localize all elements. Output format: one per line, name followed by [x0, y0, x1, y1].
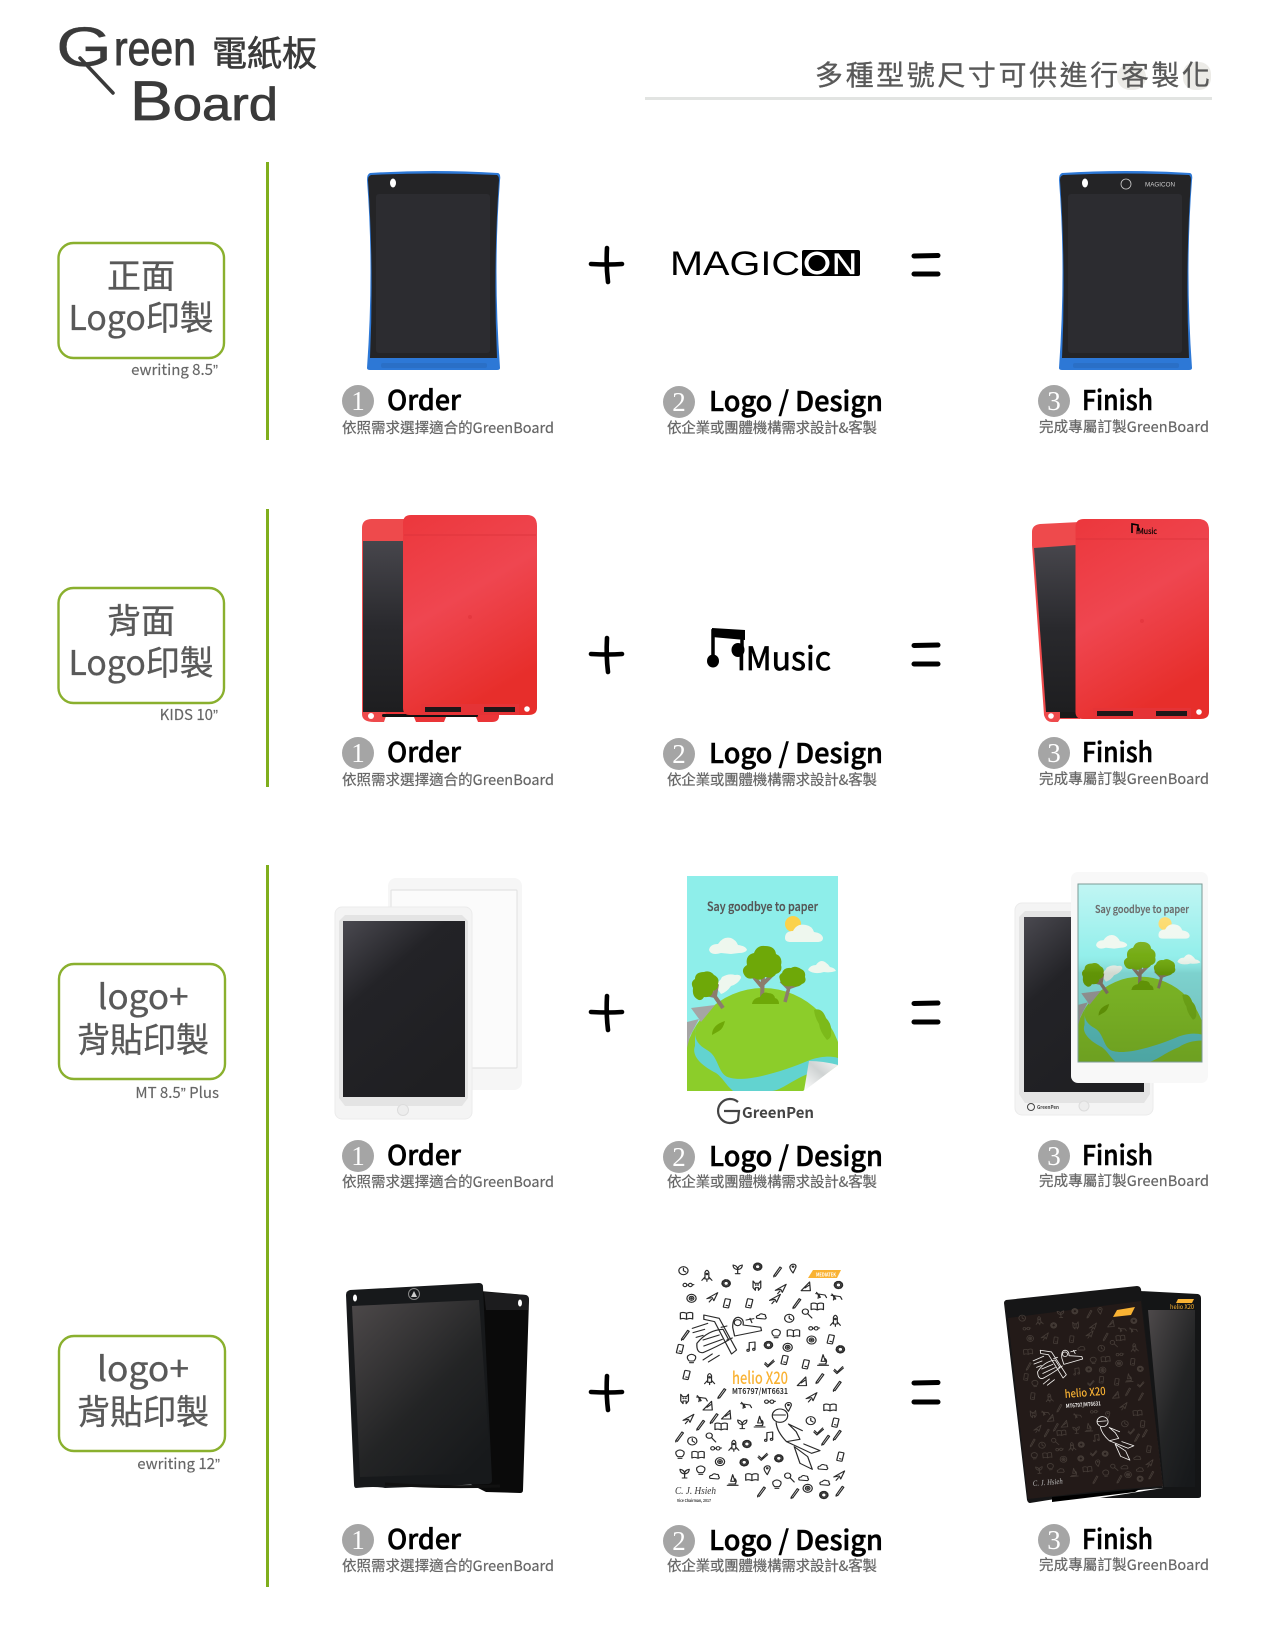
row 3: step 3: 完成專屬訂製GreenBoard [1039, 1170, 1209, 1191]
row 4: black tablet finish: helio X20 [1170, 1301, 1194, 1311]
row 4: doodle poster: Vice Chairman, 2017 [676, 1497, 712, 1504]
row 3: step 1: 1 [351, 1141, 365, 1171]
row 1: step 2 [663, 380, 883, 438]
panel: logo plus back sticker ewriting: ewriting 12” [137, 1453, 220, 1474]
row 2: step 1: Order [387, 731, 462, 770]
row 1: step 3: Finish [1082, 379, 1153, 418]
row 3: white tablet finish [1015, 872, 1208, 1115]
row 1: blue tablet finish: MAGICON [1145, 182, 1175, 188]
row 3: step 2: 2 [672, 1142, 686, 1172]
row 4: black tablet finish: helio X20 [1064, 1383, 1106, 1402]
row 4: black tablet order [346, 1283, 529, 1493]
divider rules [266, 162, 269, 1587]
panel: logo plus back sticker MT: MT 8.5” Plus [135, 1082, 219, 1103]
row 2: step 1 [342, 731, 554, 790]
panel: front logo label [58, 243, 224, 380]
row 1: MAGICON logo [670, 245, 860, 283]
row 2: iMusic logo: iMusic [737, 634, 831, 680]
logo: Green Board: reen [114, 23, 196, 76]
panel: front logo label: ewriting 8.5” [131, 359, 218, 380]
row 3: white tablet finish: GreenPen [1037, 1104, 1059, 1111]
row 2: red tablet finish [1032, 519, 1209, 722]
logo: Green Board: G [56, 15, 112, 78]
row 1: step 2: 依企業或團體機構需求設計&客製 [667, 417, 877, 438]
row 1: blue tablet finish [1059, 171, 1192, 370]
row 4: equals [914, 1382, 938, 1402]
panel: logo plus back sticker ewriting: logo+ [97, 1342, 189, 1391]
row 2: plus [591, 638, 622, 672]
logo: Green Board: Board [130, 69, 278, 132]
panel: back logo label: KIDS 10” [160, 704, 218, 725]
row 3: step 1: Order [387, 1134, 462, 1173]
row 3: plus [591, 996, 622, 1030]
panel: logo plus back sticker MT [59, 964, 225, 1103]
row 3: step 2 [663, 1135, 883, 1192]
panel: logo plus back sticker MT: logo+ [98, 970, 188, 1019]
row 1: blue tablet order [367, 171, 500, 370]
row 1: step 1: 依照需求選擇適合的GreenBoard [342, 417, 554, 438]
row 3: step 2: Logo / Design [709, 1135, 883, 1174]
row 1: plus [591, 248, 622, 282]
row 4: step 2: 2 [672, 1526, 686, 1556]
row 2: step 3: 3 [1047, 738, 1061, 768]
row 1: step 3 [1038, 379, 1209, 437]
row 3: step 3: 3 [1047, 1141, 1061, 1171]
row 1: equals [914, 256, 938, 274]
row 1: step 3: 3 [1047, 386, 1061, 416]
row 1: step 2: Logo / Design [709, 380, 883, 419]
row 4: step 3: Finish [1082, 1518, 1153, 1557]
row 4: doodle poster: C. J. Hsieh [675, 1485, 716, 1497]
row 4: step 1: Order [387, 1518, 462, 1557]
panel: logo plus back sticker ewriting [59, 1336, 225, 1474]
row 2: step 3: Finish [1082, 731, 1153, 770]
logo: Green Board: 電紙板 [212, 26, 317, 77]
row 1: step 2: 2 [672, 387, 686, 417]
panel: logo plus back sticker ewriting: 背貼印製 [77, 1385, 209, 1434]
row 3: white tablet finish: Say goodbye to paper [1095, 902, 1190, 917]
row 2: step 1: 依照需求選擇適合的GreenBoard [342, 769, 554, 790]
row 1: MAGICON logo: MAGIC [670, 245, 800, 283]
row 4: doodle poster: MT6797/MT6631 [732, 1386, 788, 1397]
row 2: step 2: 2 [672, 739, 686, 769]
row 3: equals [914, 1003, 938, 1022]
row 1: step 1: Order [387, 379, 462, 418]
row 2: red tablet finish: iMusic [1136, 526, 1157, 537]
row 4: step 2 [663, 1519, 883, 1576]
row 4: step 1: 依照需求選擇適合的GreenBoard [342, 1555, 554, 1576]
row 4: step 3 [1038, 1518, 1209, 1575]
row 1: step 1: 1 [351, 386, 365, 416]
row 2: equals [914, 645, 938, 664]
row 3: step 3: Finish [1082, 1134, 1153, 1173]
row 1: step 1 [342, 379, 554, 438]
row 3: white tablet order [335, 878, 522, 1119]
row 1: MAGICON logo: N [832, 248, 857, 281]
panel: back logo label: 背面 [107, 594, 175, 643]
row 2: step 1: 1 [351, 738, 365, 768]
row 4: step 2: 依企業或團體機構需求設計&客製 [667, 1555, 877, 1576]
row 3: poster art [683, 876, 843, 1154]
row 1: step 3: 完成專屬訂製GreenBoard [1039, 416, 1209, 437]
row 3: GreenPen logo: GreenPen [742, 1102, 814, 1123]
logo: Green Board [56, 15, 317, 132]
panel: back logo label: Logo印製 [68, 636, 214, 685]
row 4: doodle poster: helio X20 [732, 1364, 788, 1389]
heading: customization note [645, 54, 1212, 100]
row 4: step 1: 1 [351, 1525, 365, 1555]
row 4: black tablet finish [1004, 1286, 1201, 1503]
row 2: step 2: Logo / Design [709, 732, 883, 771]
panel: front logo label: Logo印製 [68, 291, 214, 340]
row 4: doodle poster: MEDIATEK [816, 1272, 836, 1278]
heading: customization note: 多種型號尺寸可供進行客製化 [815, 54, 1210, 94]
panel: front logo label: 正面 [107, 249, 175, 298]
row 2: step 3: 完成專屬訂製GreenBoard [1039, 768, 1209, 789]
row 4: step 1 [342, 1518, 554, 1576]
panel: back logo label [58, 588, 224, 725]
row 2: iMusic logo [707, 628, 831, 680]
row 3: step 3 [1038, 1134, 1209, 1191]
row 4: black tablet finish: C. J. Hsieh [1032, 1477, 1063, 1488]
row 2: step 2: 依企業或團體機構需求設計&客製 [667, 769, 877, 790]
row 3: step 2: 依企業或團體機構需求設計&客製 [667, 1171, 877, 1192]
row 4: step 3: 完成專屬訂製GreenBoard [1039, 1554, 1209, 1575]
row 4: doodle poster [675, 1263, 845, 1504]
row 2: step 3 [1038, 731, 1209, 789]
row 3: GreenPen logo [718, 1099, 814, 1123]
row 3: step 1: 依照需求選擇適合的GreenBoard [342, 1171, 554, 1192]
row 3: step 1 [342, 1134, 554, 1192]
row 4: black tablet finish: MT6797/MT6631 [1066, 1399, 1101, 1410]
row 3: poster art: Say goodbye to paper [707, 896, 819, 915]
row 4: plus [591, 1376, 622, 1410]
row 2: step 2 [663, 732, 883, 790]
row 4: step 2: Logo / Design [709, 1519, 883, 1558]
row 2: red tablet order [362, 515, 537, 722]
panel: logo plus back sticker MT: 背貼印製 [77, 1013, 209, 1062]
row 4: step 3: 3 [1047, 1525, 1061, 1555]
